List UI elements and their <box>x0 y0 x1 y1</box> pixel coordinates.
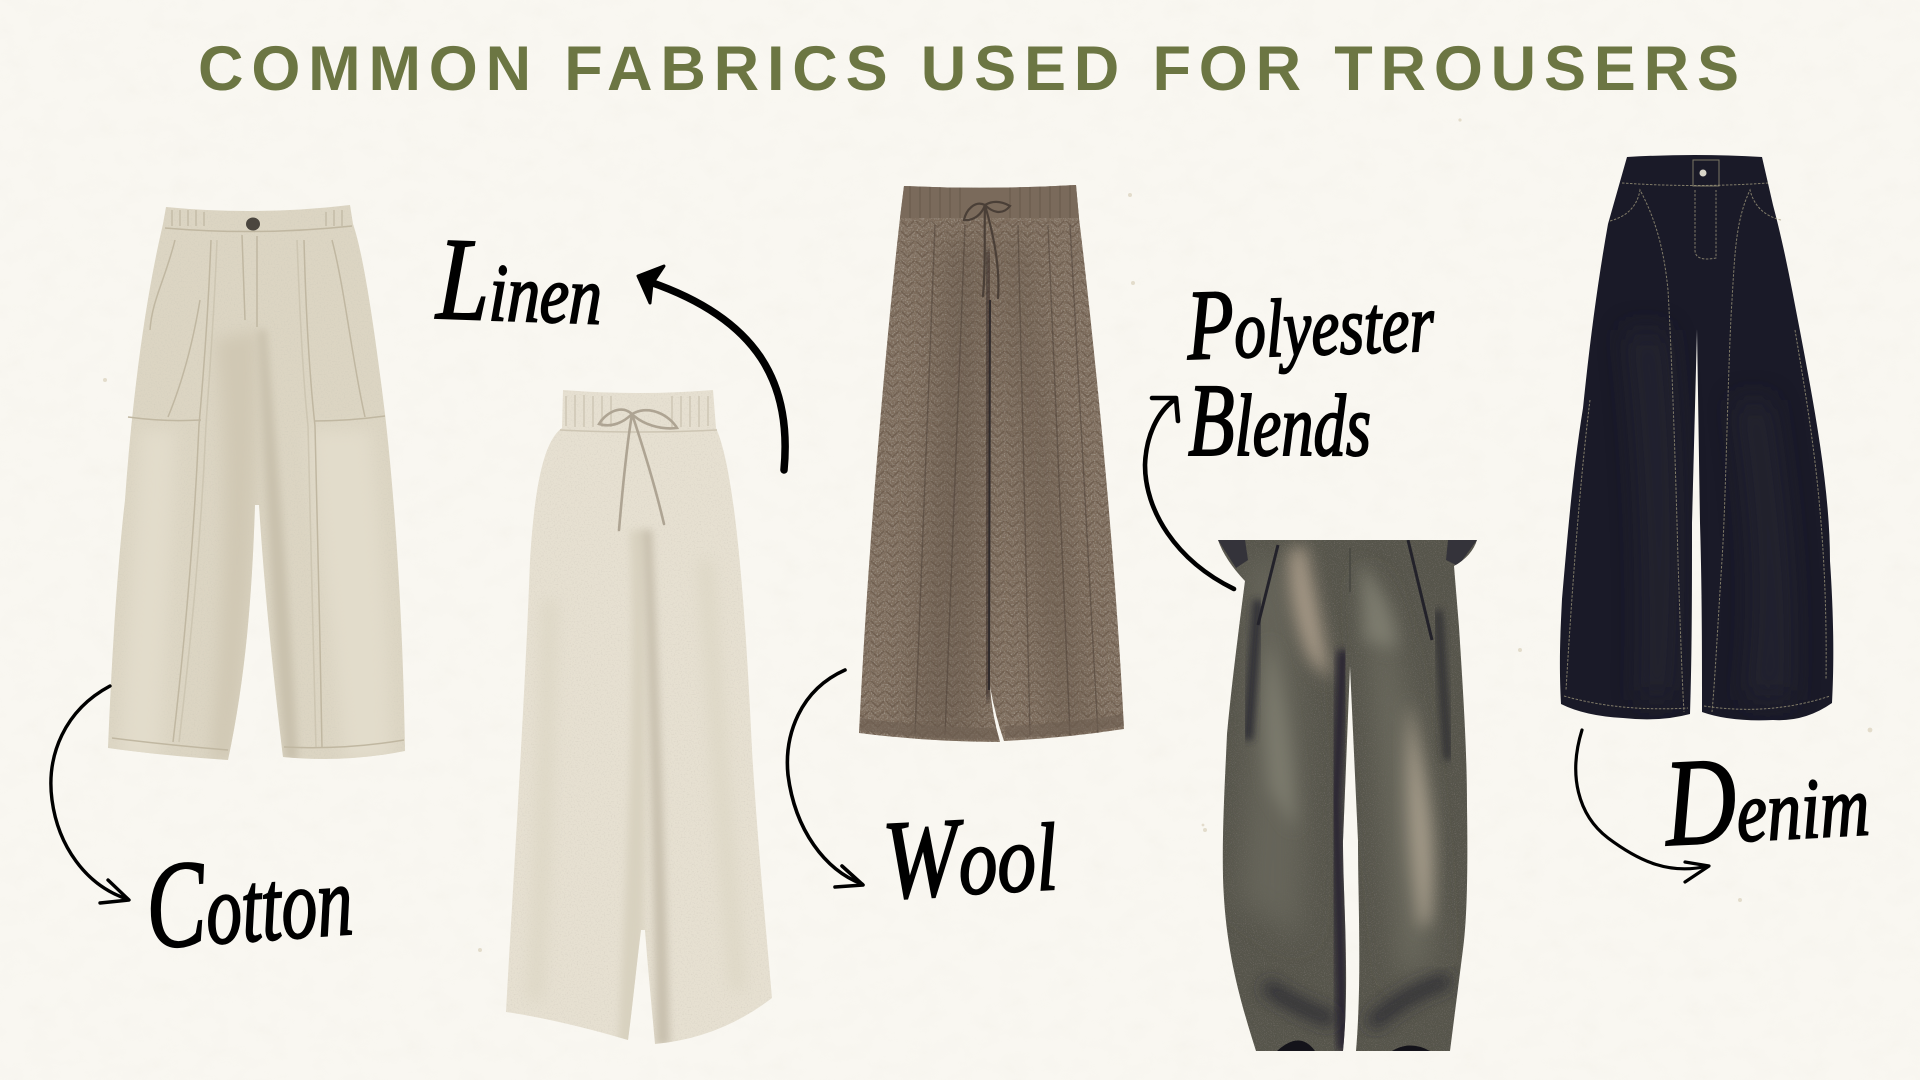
label: Polyester Blends <box>1184 261 1436 478</box>
label: Linen: Linen <box>433 213 605 350</box>
label: Wool: Wool <box>880 790 1060 923</box>
title: COMMON FABRICS USED FOR TROUSERS <box>198 34 1739 104</box>
denim stitching <box>1564 183 1830 712</box>
label: Polyester Blends: Blends <box>1188 363 1371 478</box>
label: Polyester Blends: Polyester <box>1184 261 1436 381</box>
arrow: linen <box>638 266 785 470</box>
icon: jeans button <box>1700 170 1706 176</box>
drawstring bow <box>599 410 677 530</box>
icon: waist button <box>246 218 260 230</box>
panel: wool trousers <box>855 180 1130 750</box>
panel: cotton trousers <box>100 200 410 770</box>
label: Cotton: Cotton <box>141 824 356 975</box>
panel: polyester blend trousers <box>1215 535 1480 1055</box>
arrow: polyester blends <box>1145 398 1234 589</box>
label: Denim: Denim <box>1660 724 1872 872</box>
arrow: wool <box>787 670 863 887</box>
panel: linen trousers <box>500 385 780 1055</box>
panel: denim trousers <box>1555 150 1840 725</box>
arrow: denim <box>1576 730 1709 882</box>
drawstring <box>964 202 1010 298</box>
arrow: cotton <box>51 686 129 903</box>
elastic waist shirring <box>172 210 342 226</box>
